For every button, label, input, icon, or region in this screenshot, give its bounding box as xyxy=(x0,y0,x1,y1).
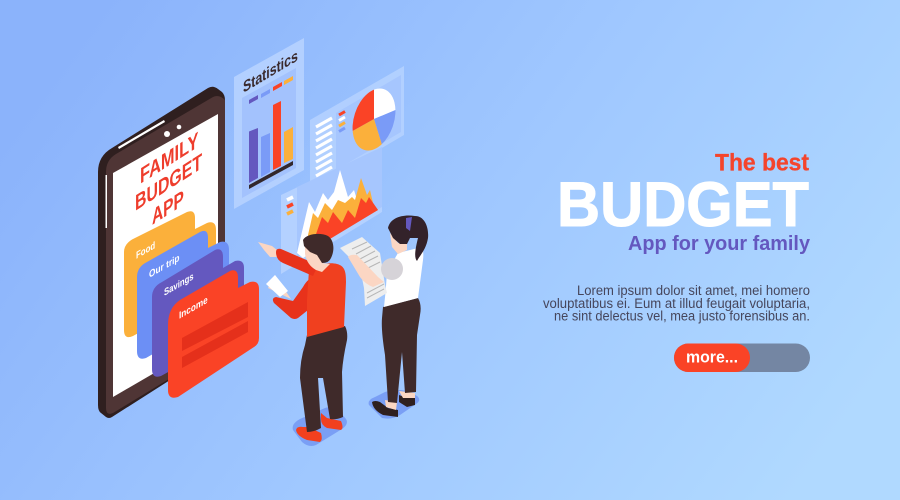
chart legend xyxy=(249,76,293,104)
woman hair band xyxy=(406,217,412,231)
phone xyxy=(98,87,225,418)
man shadow xyxy=(293,407,347,446)
man xyxy=(258,234,347,446)
woman sleeve xyxy=(381,258,403,280)
app title: BUDGET xyxy=(135,148,202,216)
man trousers xyxy=(300,326,347,432)
panel: pie chart xyxy=(310,66,404,181)
folder: income: Income xyxy=(179,294,208,322)
woman xyxy=(340,216,428,419)
phone face xyxy=(106,96,225,414)
area legend xyxy=(287,197,293,214)
man pointing arm xyxy=(258,242,318,276)
woman ankles xyxy=(385,391,415,410)
panel: statistics xyxy=(234,38,304,209)
man torso xyxy=(307,263,346,337)
heading: the best: The best xyxy=(715,150,809,176)
body text: ne sint delectus vel, mea justo forensibus an. xyxy=(554,308,810,324)
woman face xyxy=(390,233,407,254)
subheading: App for your family xyxy=(628,233,811,255)
body text: voluptatibus ei. Eum at illud feugait voluptaria, xyxy=(543,296,810,311)
folder: food: Food xyxy=(136,240,155,262)
panel: area chart xyxy=(281,147,382,274)
woman hair xyxy=(388,216,428,261)
woman trousers xyxy=(382,298,421,403)
woman shadow xyxy=(369,390,419,419)
folder: savings xyxy=(152,249,244,377)
man shoes xyxy=(296,413,342,442)
body text: Lorem ipsum dolor sit amet, mei homero xyxy=(577,283,810,298)
pie legend xyxy=(339,112,345,132)
app title: APP xyxy=(152,185,184,230)
document held xyxy=(340,237,387,306)
pie chart xyxy=(352,88,396,150)
woman shoes xyxy=(372,395,415,417)
more button: more... xyxy=(686,348,738,366)
more button xyxy=(674,344,810,372)
woman shirt xyxy=(384,247,423,307)
phone screen xyxy=(113,114,218,397)
app title xyxy=(135,127,202,230)
body text xyxy=(543,283,810,324)
heading: budget: BUDGET xyxy=(557,170,809,240)
app title: FAMILY xyxy=(140,127,199,189)
phone camera xyxy=(164,125,181,137)
panel: statistics: Statistics xyxy=(243,46,298,97)
man neck and face xyxy=(305,246,330,272)
text lines xyxy=(316,118,332,176)
folder: our trip: Our trip xyxy=(149,253,179,281)
man arm holding paper xyxy=(266,275,320,319)
income form lines xyxy=(182,302,248,368)
phone body xyxy=(98,87,225,418)
folder: savings: Savings xyxy=(164,271,194,299)
phone side highlight xyxy=(106,175,107,228)
man hair xyxy=(303,234,333,263)
woman arm xyxy=(348,255,384,287)
bar chart xyxy=(249,101,293,189)
phone speaker highlight xyxy=(118,120,165,149)
folder: our trip xyxy=(137,231,229,359)
area chart xyxy=(297,170,378,258)
folder: income xyxy=(168,270,259,398)
folder: food xyxy=(124,211,216,337)
